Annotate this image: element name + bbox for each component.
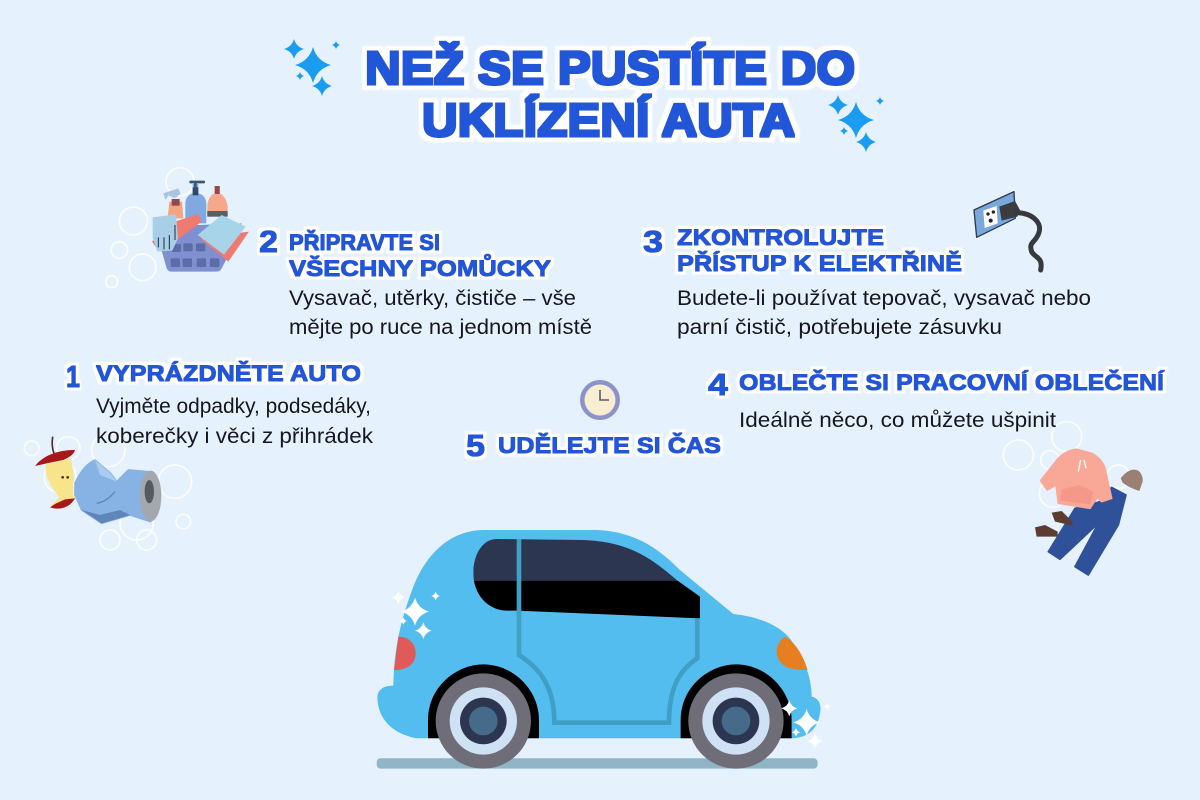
- front wheel: [681, 664, 792, 769]
- icon: title sparkles right: [828, 95, 884, 152]
- step 3 text: parní čistič, potřebujete zásuvku: [677, 315, 1002, 339]
- step 4 heading: OBLEČTE SI PRACOVNÍ OBLEČENÍ: [739, 370, 1165, 395]
- step 2 text: [289, 286, 592, 339]
- step 2 heading: 2: [259, 224, 278, 259]
- step 5 heading: [466, 428, 721, 463]
- step 2 text: mějte po ruce na jednom místě: [289, 315, 592, 339]
- step 2 heading: PŘIPRAVTE SI: [289, 230, 440, 255]
- tail light: [394, 637, 416, 670]
- step 1 text: [96, 394, 373, 448]
- step 2 heading: [259, 224, 551, 281]
- step 3 heading: PŘÍSTUP K ELEKTŘINĚ: [677, 251, 962, 276]
- car body: [377, 530, 821, 738]
- rear wheel: [428, 664, 539, 769]
- title: NEŽ SE PUSTÍTE DO: [365, 42, 855, 94]
- step 1 heading: 1: [66, 359, 80, 394]
- sparkles: [392, 591, 831, 748]
- title: [365, 42, 855, 146]
- step 3 heading: 3: [643, 224, 663, 259]
- icon: clock: [580, 380, 620, 420]
- step 4 heading: [708, 367, 1165, 402]
- ground line: [377, 758, 818, 769]
- door outline: [519, 539, 697, 723]
- step 1 heading: VYPRÁZDNĚTE AUTO: [96, 361, 361, 386]
- step 2 heading: VŠECHNY POMŮCKY: [289, 253, 551, 281]
- step 3 text: Budete-li používat tepovač, vysavač nebo: [677, 286, 1091, 310]
- step 2 text: Vysavač, utěrky, čističe – vše: [289, 286, 576, 310]
- icon: cleaning basket: [106, 168, 249, 288]
- icon: wall socket and plug: [974, 192, 1041, 270]
- step 1 text: koberečky i věci z přihrádek: [96, 424, 373, 448]
- step 3 heading: [643, 224, 962, 276]
- icon: apple core and crushed can: [24, 433, 192, 550]
- icon: title sparkles left: [284, 39, 340, 96]
- step 4 text: Ideálně něco, co můžete ušpinit: [739, 408, 1056, 432]
- step 4 heading: 4: [708, 367, 729, 402]
- step 5 heading: 5: [466, 428, 485, 463]
- icon: work clothes: [1003, 422, 1143, 575]
- car illustration: [377, 530, 831, 769]
- step 5 heading: UDĚLEJTE SI ČAS: [498, 433, 721, 458]
- windows: [470, 537, 703, 621]
- step 3 text: [677, 286, 1091, 339]
- title: UKLÍZENÍ AUTA: [422, 94, 795, 146]
- step 1 heading: [66, 359, 361, 394]
- step 3 heading: ZKONTROLUJTE: [677, 225, 884, 250]
- head light: [777, 637, 808, 670]
- step 1 text: Vyjměte odpadky, podsedáky,: [96, 394, 371, 418]
